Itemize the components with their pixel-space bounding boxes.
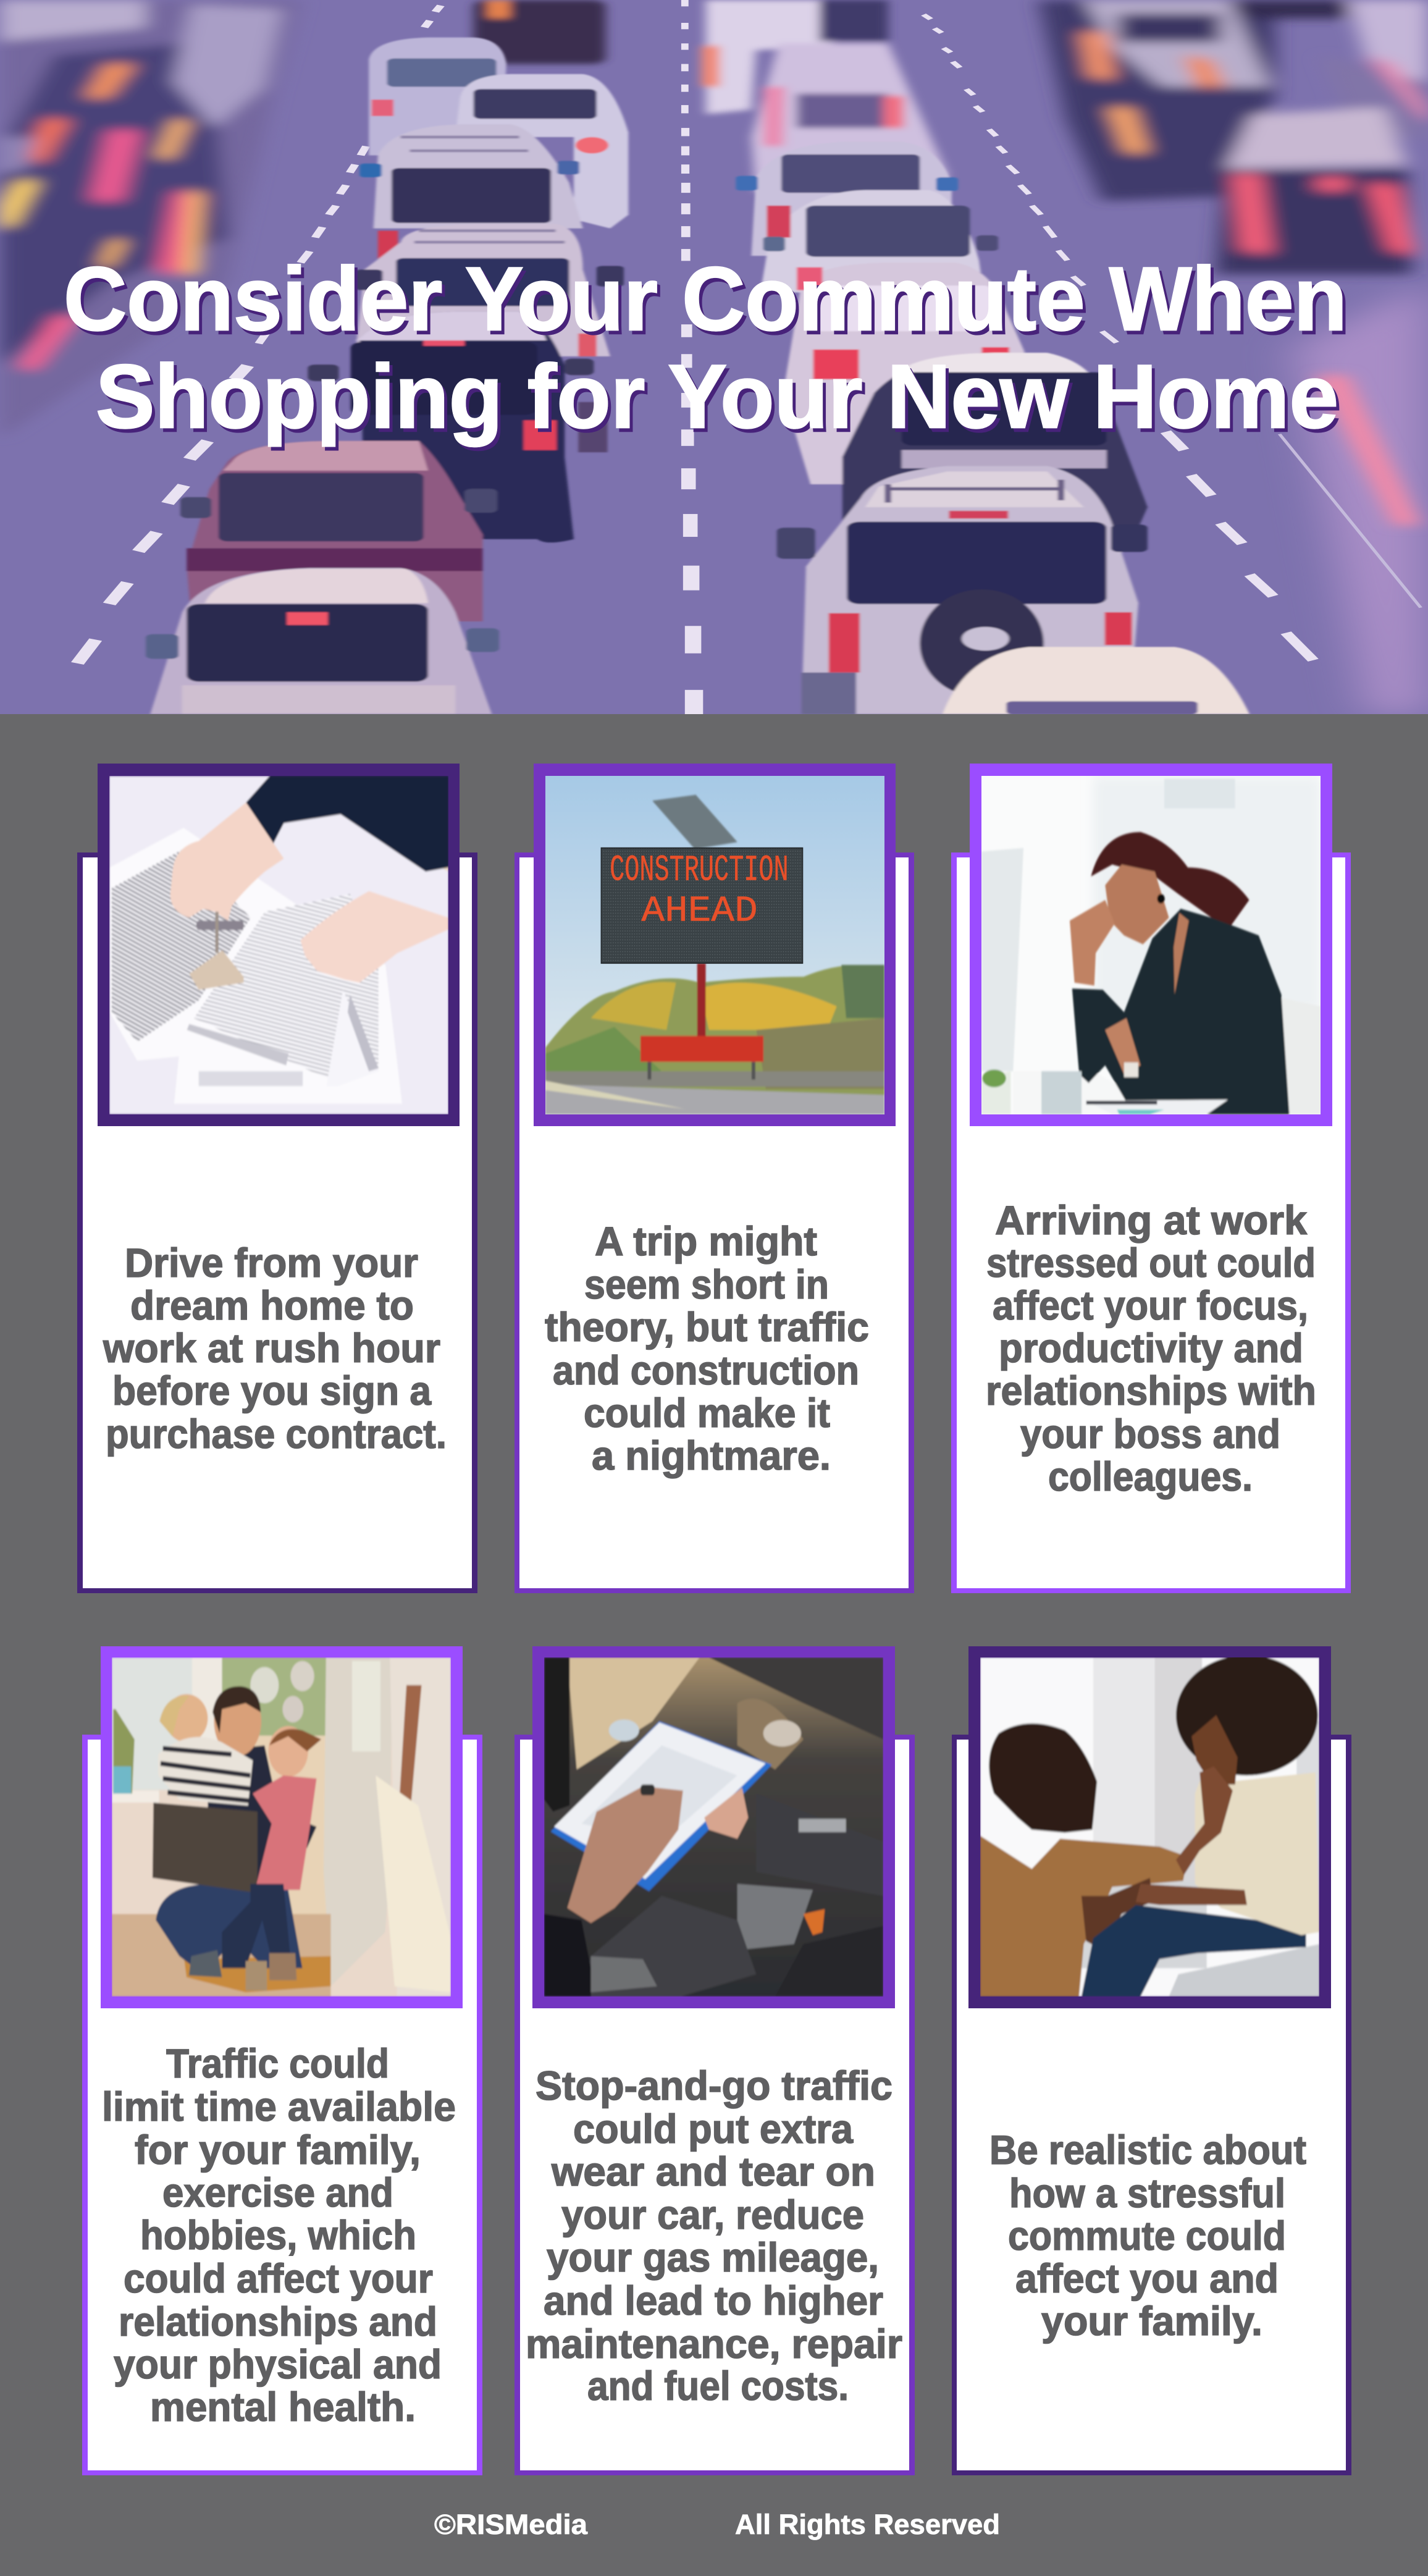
footer: copyright [434, 2509, 1000, 2540]
photo: mechanic clipboard over engine [544, 1657, 883, 1997]
panel: card 2 construction [514, 764, 914, 1593]
panel: card 5 car wear and tear [514, 1646, 915, 2475]
photo: contract and house key [109, 776, 448, 1114]
text: be realistic about: how a stressful [1009, 2170, 1285, 2216]
title: Consider Your Commute When [64, 248, 1347, 349]
text: a trip might seem short: seem short in [584, 1261, 829, 1307]
sign text: AHEAD [641, 891, 758, 932]
panel: card 3 stressed at work [951, 764, 1351, 1593]
cars right column [736, 141, 1250, 714]
footer: copyright: All Rights Reserved [735, 2509, 1000, 2540]
text: traffic could limit time [102, 2040, 456, 2430]
footer: copyright: ©RISMedia [434, 2509, 588, 2540]
text: stop and go traffic: wear and tear on [551, 2149, 875, 2194]
text: drive from your dream home: dream home to [130, 1282, 414, 1328]
text: stop and go traffic: your gas mileage, [547, 2234, 879, 2280]
text: arriving at work stressed: colleagues. [1048, 1454, 1253, 1499]
text: traffic could limit time: your physical and [114, 2341, 442, 2387]
text: arriving at work stressed: productivity and [999, 1325, 1303, 1371]
text: be realistic about [989, 2127, 1306, 2344]
text: arriving at work stressed: affect your focus, [993, 1282, 1308, 1328]
text: drive from your dream home: before you sign a [112, 1368, 432, 1413]
text: be realistic about: your family. [1041, 2298, 1262, 2344]
text: drive from your dream home [103, 1240, 447, 1457]
photo: stressed woman at desk [981, 776, 1321, 1114]
text: stop and go traffic: your car, reduce [561, 2192, 864, 2237]
text: a trip might seem short: could make it [584, 1390, 830, 1436]
text: drive from your dream home: work at rush hour [103, 1325, 440, 1371]
blurred top center and right traffic [474, 0, 947, 192]
text: a trip might seem short: A trip might [595, 1218, 817, 1264]
panel: card 1 rush hour test drive [77, 764, 477, 1593]
text: traffic could limit time: relationships and [119, 2299, 437, 2344]
text: be realistic about: commute could [1008, 2213, 1286, 2258]
text: traffic could limit time: for your family, [135, 2127, 421, 2173]
panel: card 4 family time [82, 1646, 482, 2475]
text: stop and go traffic: and lead to higher [544, 2278, 883, 2323]
text: arriving at work stressed: stressed out could [986, 1240, 1316, 1286]
text: traffic could limit time: hobbies, which [140, 2212, 416, 2258]
text: traffic could limit time: limit time available [102, 2084, 456, 2129]
text: a trip might seem short: theory, but traffic [545, 1304, 869, 1350]
text: arriving at work stressed: your boss and [1020, 1411, 1280, 1457]
hero photo: highway traffic [0, 0, 1428, 714]
photo: father talking with daughter [980, 1657, 1319, 1997]
sign text [610, 850, 789, 932]
text: stop and go traffic [526, 2063, 902, 2409]
text: arriving at work stressed: relationships with [986, 1368, 1316, 1413]
panel: card 6 be realistic [952, 1646, 1351, 2475]
text: arriving at work stressed [986, 1197, 1316, 1499]
text: be realistic about: affect you and [1015, 2255, 1279, 2301]
text: a trip might seem short [545, 1218, 869, 1478]
title: Shopping for Your New Home [96, 346, 1338, 447]
text: traffic could limit time: Traffic could [166, 2040, 389, 2086]
text: stop and go traffic: Stop-and-go traffic [536, 2063, 892, 2108]
text: stop and go traffic: maintenance, repair [526, 2321, 902, 2367]
text: traffic could limit time: mental health. [150, 2384, 416, 2430]
text: traffic could limit time: could affect your [124, 2255, 433, 2301]
text: a trip might seem short: a nightmare. [592, 1433, 831, 1478]
blurred left traffic [0, 0, 301, 439]
photo: construction ahead road sign [545, 776, 884, 1114]
text: drive from your dream home: Drive from your [125, 1240, 418, 1286]
title [64, 248, 1347, 447]
text: be realistic about: Be realistic about [989, 2127, 1306, 2173]
sign text: CONSTRUCTION [610, 850, 789, 891]
text: a trip might seem short: and construction [553, 1347, 859, 1393]
text: drive from your dream home: purchase contract. [106, 1411, 447, 1457]
text: arriving at work stressed: Arriving at work [995, 1197, 1307, 1243]
photo: father hugging children at door [112, 1657, 451, 1997]
text: stop and go traffic: could put extra [573, 2106, 854, 2152]
cars left column [146, 38, 628, 714]
text: stop and go traffic: and fuel costs. [587, 2363, 849, 2409]
text: traffic could limit time: exercise and [162, 2170, 393, 2215]
